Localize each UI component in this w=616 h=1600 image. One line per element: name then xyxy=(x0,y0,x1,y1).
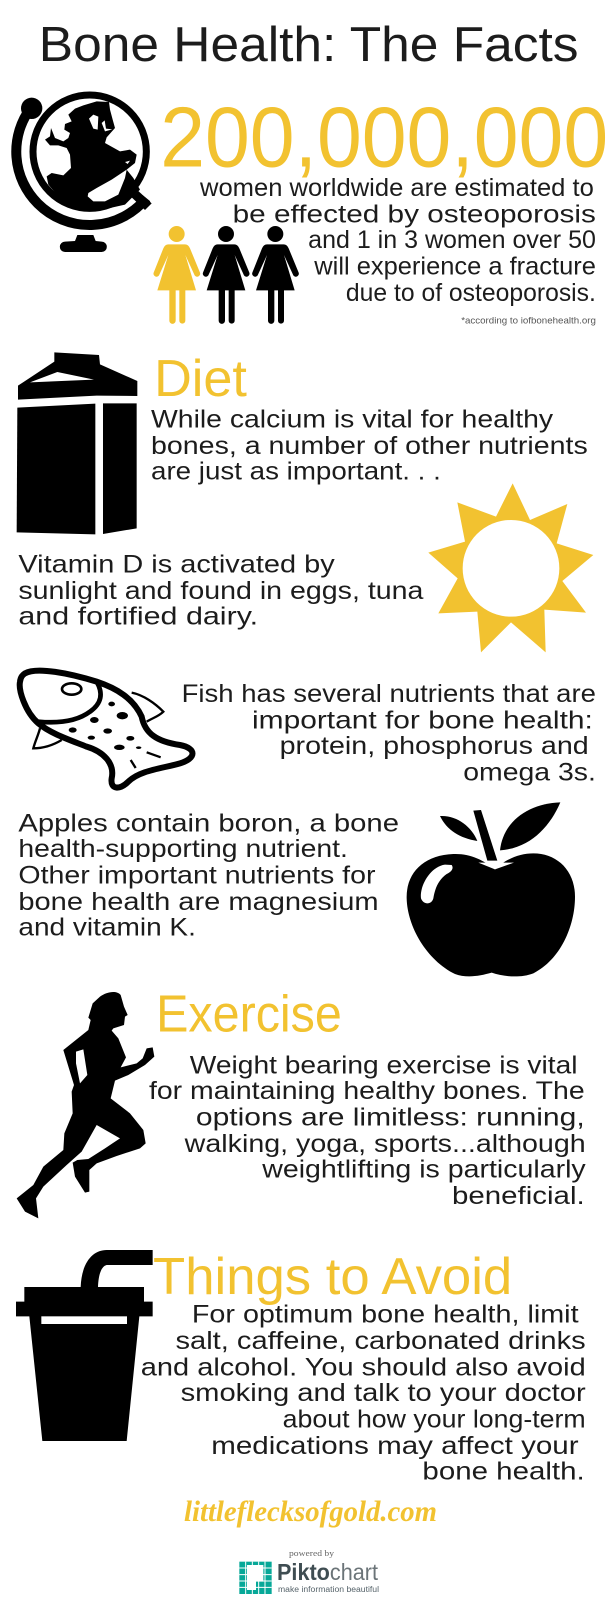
text: exercise xyxy=(149,1051,586,1210)
heading: Diet: Diet xyxy=(154,350,247,408)
text: vitamin D: Vitamin D is activated by xyxy=(18,550,335,578)
text: things to avoid: and alcohol. You should also avoid xyxy=(141,1353,586,1381)
icon: milk carton xyxy=(17,352,137,534)
text: apples: Apples contain boron, a bone xyxy=(18,810,399,838)
text: osteoporosis statistic xyxy=(199,174,596,307)
text: osteoporosis statistic: will experience a fracture xyxy=(313,252,596,280)
text: diet intro: While calcium is vital for healthy xyxy=(151,406,554,434)
heading: Exercise: Exercise xyxy=(156,986,342,1044)
text: apples: health-supporting nutrient. xyxy=(18,835,348,863)
text: exercise: options are limitless: running, xyxy=(196,1104,585,1132)
text: fish xyxy=(182,680,596,787)
icon: runner xyxy=(17,992,154,1218)
title: Bone Health: The Facts xyxy=(39,18,579,72)
icon: woman black xyxy=(203,226,250,324)
text: things to avoid: about how your long-term xyxy=(283,1406,586,1434)
text: apples: and vitamin K. xyxy=(18,914,196,942)
website: littleflecksofgold.com xyxy=(184,1495,437,1528)
icon: globe xyxy=(16,95,152,252)
icon: drink cup xyxy=(16,1250,153,1441)
text: apples xyxy=(18,810,399,942)
text: osteoporosis statistic: due to of osteoporosis. xyxy=(346,279,596,307)
text: diet intro: are just as important. . . xyxy=(151,458,441,486)
piktochart logo xyxy=(239,1559,379,1594)
text: apples: bone health are magnesium xyxy=(18,888,379,916)
text: fish: protein, phosphorus and xyxy=(280,732,589,760)
text: diet intro xyxy=(151,406,588,486)
tagline: make information beautiful xyxy=(278,1585,379,1594)
text: things to avoid: For optimum bone health, limit xyxy=(192,1300,579,1328)
text: exercise: beneficial. xyxy=(452,1182,585,1210)
footnote: *according to iofbonehealth.org xyxy=(461,315,596,325)
text: fish: omega 3s. xyxy=(463,759,596,787)
text: exercise: Weight bearing exercise is vital xyxy=(190,1051,578,1079)
text: diet intro: bones, a number of other nutrients xyxy=(151,432,588,460)
heading: Things to Avoid: Things to Avoid xyxy=(153,1248,512,1306)
text: osteoporosis statistic: and 1 in 3 women over 50 xyxy=(308,226,596,254)
text: exercise: weightlifting is particularly xyxy=(261,1156,586,1184)
powered by label: powered by xyxy=(289,1548,335,1558)
text: things to avoid: bone health. xyxy=(422,1458,585,1486)
text: things to avoid xyxy=(141,1300,586,1486)
icon: woman yellow xyxy=(153,226,200,324)
icon: piktochart mark xyxy=(239,1562,272,1594)
text: apples: Other important nutrients for xyxy=(18,862,376,890)
icon: woman black second xyxy=(252,226,299,324)
text: things to avoid: salt, caffeine, carbonated drinks xyxy=(176,1327,586,1355)
text: things to avoid: medications may affect your xyxy=(211,1432,579,1460)
text: osteoporosis statistic: women worldwide are estimated to xyxy=(199,174,594,202)
text: exercise: walking, yoga, sports...although xyxy=(184,1130,586,1158)
icon: fish xyxy=(20,671,192,788)
text: exercise: for maintaining healthy bones. The xyxy=(149,1077,585,1105)
text: fish: Fish has several nutrients that are xyxy=(182,680,596,708)
icon: sun xyxy=(428,483,593,652)
text: vitamin D: and fortified dairy. xyxy=(18,602,258,630)
icon: apple xyxy=(407,802,575,976)
icon: three women xyxy=(153,226,299,324)
text: fish: important for bone health: xyxy=(252,707,593,735)
text: things to avoid: smoking and talk to your doctor xyxy=(181,1379,586,1407)
text: vitamin D: sunlight and found in eggs, tuna xyxy=(18,577,424,605)
text: osteoporosis statistic: be effected by osteoporosis xyxy=(233,200,596,228)
text: vitamin D xyxy=(18,550,424,630)
wordmark: Piktochart xyxy=(277,1559,379,1585)
